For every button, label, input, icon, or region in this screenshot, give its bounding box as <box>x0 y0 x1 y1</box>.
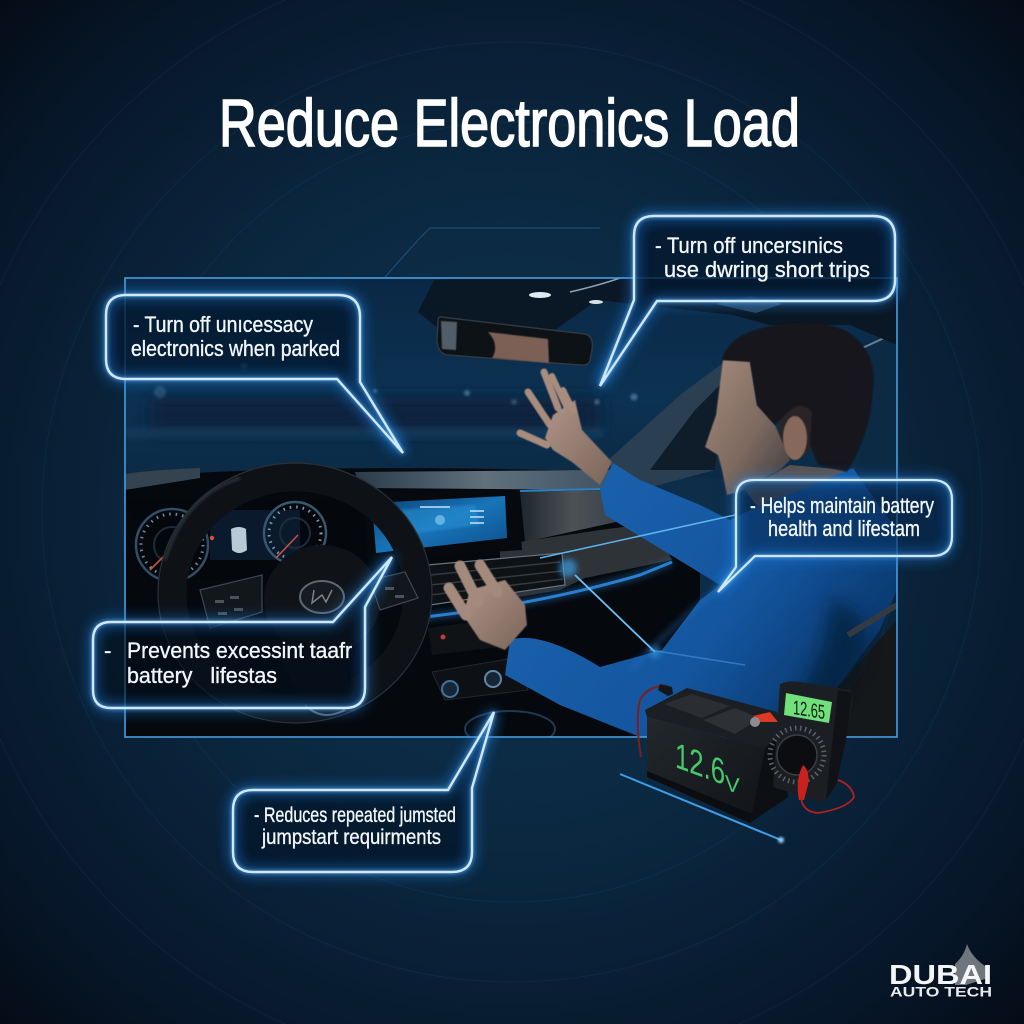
right gauge <box>264 502 326 564</box>
callout text: - Turn off uncersınics <box>655 233 843 258</box>
windshield night view <box>125 278 897 478</box>
callout text: jumpstart requirments <box>261 826 441 849</box>
man: neck <box>745 465 845 506</box>
callout: bottom <box>233 712 494 872</box>
dashboard <box>120 468 700 747</box>
headliner and mirror mount <box>418 278 897 345</box>
car icon <box>231 527 247 553</box>
hand on vent <box>449 565 527 650</box>
man: body and shirt <box>505 463 897 737</box>
callout text: battery lifestas <box>127 663 277 688</box>
callout dash: - <box>104 638 112 663</box>
raised hand <box>520 372 612 485</box>
panel: car interior scene <box>120 278 897 747</box>
panel frame <box>125 278 897 737</box>
callout text: - Reduces repeated jumsted <box>254 804 456 827</box>
callout: top left <box>106 295 403 453</box>
man: head <box>705 323 874 495</box>
callout text: health and lifestam <box>768 516 920 541</box>
center touchscreen <box>374 496 522 553</box>
callout: top right <box>600 216 895 386</box>
callout text: - Turn off unıcessacy <box>133 312 314 337</box>
callout text: electronics when parked <box>131 336 340 361</box>
side window and A-pillar <box>606 330 897 490</box>
callout: lower left <box>93 557 392 708</box>
multimeter dial <box>770 728 824 782</box>
battery voltage readout: 12.6 <box>675 734 725 793</box>
callout text: Prevents excessint taafr <box>127 638 352 663</box>
instrument cluster <box>136 502 326 581</box>
callout text: use dwring short trips <box>664 257 870 282</box>
left gauge <box>136 509 208 581</box>
rear-view mirror <box>437 317 592 365</box>
multimeter readout: 12.65 <box>793 697 825 724</box>
steering wheel <box>158 463 432 723</box>
callout: right <box>718 480 952 592</box>
battery voltage unit: V <box>725 770 740 799</box>
icon: car battery <box>638 684 788 823</box>
logo: Dubai Auto Tech <box>889 944 992 1000</box>
callout text: - Helps maintain battery <box>750 493 935 518</box>
battery light line <box>620 774 784 843</box>
logo wordmark: DUBAI <box>889 959 992 990</box>
glowing light lines <box>540 515 735 658</box>
icon: multimeter <box>770 681 854 813</box>
red probe and wire <box>798 765 854 813</box>
title: Reduce Electronics Load <box>219 86 800 161</box>
logo subline: AUTO TECH <box>890 984 992 1000</box>
